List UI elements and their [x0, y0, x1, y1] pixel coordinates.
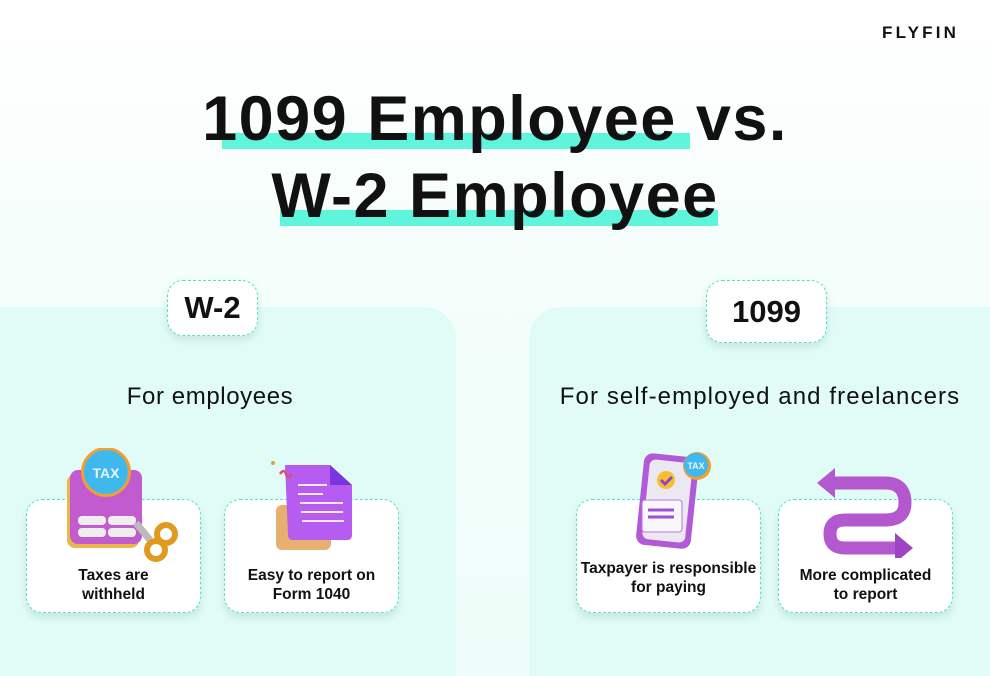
title	[202, 84, 788, 231]
panel: W-2	[0, 307, 456, 676]
card: taxes withheld: withheld	[82, 586, 145, 603]
badge: W-2: W-2	[184, 290, 241, 325]
icon: phone tax: TAX	[687, 461, 705, 471]
panel: 1099	[529, 307, 990, 676]
subtitle: employees: For employees	[127, 383, 293, 410]
card: taxpayer responsible: for paying	[631, 579, 706, 596]
title: W-2 Employee	[271, 161, 719, 231]
card: complicated	[778, 499, 953, 613]
card: easy to report	[224, 499, 399, 613]
badge: 1099: 1099	[732, 294, 801, 328]
card: taxes withheld: Taxes are	[78, 567, 149, 584]
card: easy to report: Form 1040	[273, 586, 350, 603]
badge: 1099	[706, 280, 827, 343]
card: easy to report: Easy to report on	[248, 567, 375, 584]
card: complicated: to report	[834, 586, 897, 603]
icon: tax scissors	[67, 448, 178, 562]
card: taxpayer responsible: Taxpayer is responsible	[581, 560, 756, 577]
icon: document	[271, 461, 352, 550]
title: 1099 Employee vs.	[202, 84, 788, 154]
badge: W-2	[167, 280, 258, 336]
card: complicated: More complicated	[800, 567, 931, 584]
icon: arrows	[817, 468, 913, 558]
icon: phone tax	[636, 452, 711, 549]
card: taxpayer responsible	[576, 499, 761, 613]
card: taxes withheld	[26, 499, 201, 613]
logo: FLYFIN	[882, 23, 959, 42]
icon: tax scissors: TAX	[93, 465, 120, 481]
subtitle: self-employed: For self-employed and freelancers	[560, 383, 960, 410]
